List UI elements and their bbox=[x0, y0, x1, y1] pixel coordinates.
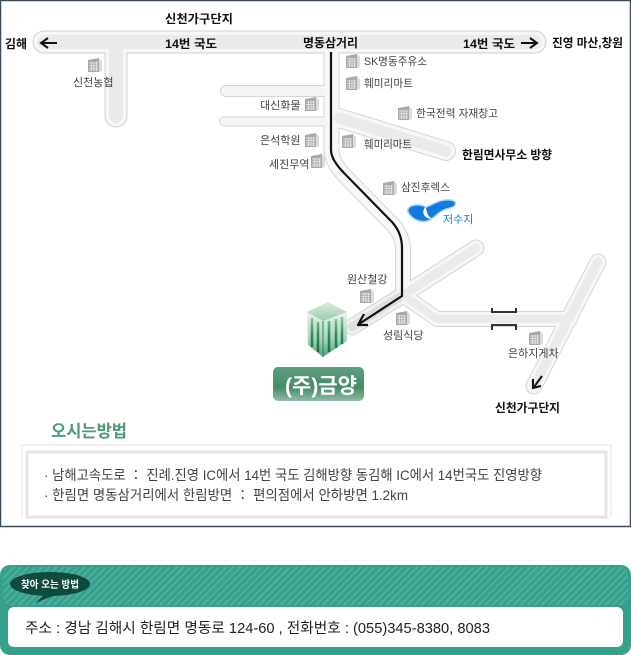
panel: directions bbox=[22, 445, 611, 519]
bridge marks bbox=[492, 308, 516, 330]
place: Sincheon Nonghyup: 신천농협 bbox=[73, 75, 113, 89]
road network bbox=[44, 42, 598, 386]
route line with arrow bbox=[331, 52, 402, 325]
heading: top complex label: 신천가구단지 bbox=[165, 11, 233, 26]
place: Sejin Trading: 세진무역 bbox=[269, 158, 309, 171]
place: Daesin Hwamul bbox=[260, 97, 319, 112]
company building bbox=[307, 302, 347, 357]
directions line 2: · 한림면 명동삼거리에서 한림방면 ： 편의점에서 안하방면 1.2km bbox=[44, 487, 408, 503]
address box bbox=[8, 607, 623, 647]
place: Eunseok Hagwon bbox=[260, 133, 319, 147]
place: Seongrim restaurant bbox=[383, 311, 423, 342]
place: Wonsan Steel: 원산철강 bbox=[347, 273, 387, 286]
label: bottom complex: 신천가구단지 bbox=[495, 400, 560, 415]
place: Seongrim restaurant: 성림식당 bbox=[383, 329, 423, 342]
label: road 14 west: 14번 국도 bbox=[165, 37, 217, 51]
label: Gimhae: 김해 bbox=[5, 37, 27, 51]
reservoir: 저수지 bbox=[443, 213, 473, 226]
label: road 14 east: 14번 국도 bbox=[463, 37, 515, 51]
heading: directions: 오시는방법 bbox=[51, 422, 127, 441]
address text: 주소 : 경남 김해시 한림면 명동로 124-60 , 전화번호 : (055)345-8380, 8083 bbox=[25, 620, 490, 637]
place: Eunseok Hagwon: 은석학원 bbox=[260, 134, 300, 147]
company label: (주)금양 bbox=[285, 375, 357, 398]
place: Family Mart 1: 훼미리마트 bbox=[364, 77, 413, 90]
arrow: west bbox=[41, 38, 57, 48]
place: Eunha forklift bbox=[508, 331, 559, 360]
place: Family Mart 2: 훼미리마트 bbox=[364, 138, 412, 151]
place: Samjin Rex: 삼진후렉스 bbox=[401, 181, 450, 194]
place: KEPCO storage bbox=[398, 106, 498, 120]
label: Hallim office: 한림면사무소 방향 bbox=[462, 147, 552, 162]
place: Sincheon Nonghyup bbox=[73, 58, 113, 89]
company label bbox=[273, 367, 364, 401]
place: Wonsan Steel bbox=[347, 273, 387, 303]
reservoir bbox=[408, 200, 473, 226]
speech bubble: 찾아 오는 방법 bbox=[21, 578, 79, 591]
place: Daesin Hwamul: 대신화물 bbox=[260, 99, 300, 112]
directions line 1: · 남해고속도로 ： 진례.진영 IC에서 14번 국도 김해방향 동김해 IC에서 14번국도 진영방향 bbox=[44, 467, 542, 483]
place: Family Mart 2 bbox=[342, 134, 412, 151]
place: Family Mart 1 bbox=[346, 76, 413, 90]
place: SK gas station bbox=[346, 54, 427, 68]
place: Sejin Trading bbox=[269, 154, 325, 171]
place: Eunha forklift: 은하지게차 bbox=[508, 346, 559, 360]
arrow: south bbox=[533, 376, 542, 388]
label: intersection: 명동삼거리 bbox=[303, 35, 358, 50]
arrow: east bbox=[521, 38, 537, 48]
place: KEPCO storage: 한국전력 자재창고 bbox=[416, 107, 498, 120]
place: Samjin Rex bbox=[383, 181, 450, 195]
place: SK gas station: SK명동주유소 bbox=[364, 55, 427, 68]
speech bubble bbox=[10, 572, 90, 603]
panel: address band bbox=[0, 565, 631, 655]
label: destinations east: 진영 마산,창원 bbox=[552, 35, 623, 50]
